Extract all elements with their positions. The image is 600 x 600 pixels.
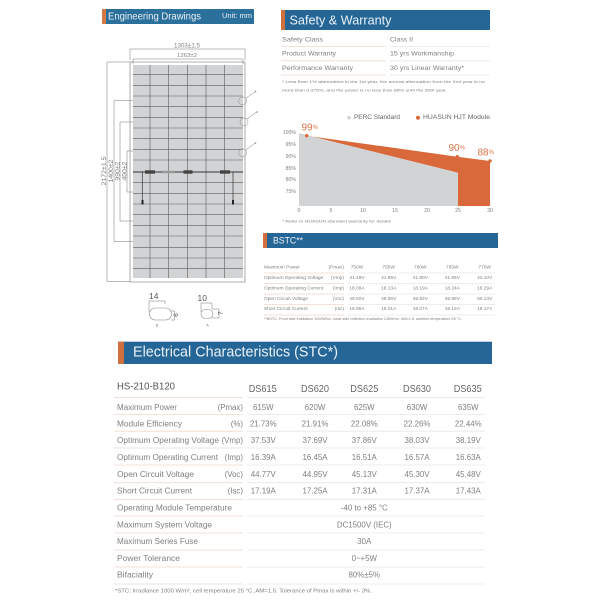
height dimensions: 990±2 xyxy=(114,161,121,180)
row: module efficiency: 21.91% xyxy=(302,420,328,428)
row: maximum system voltage xyxy=(117,520,392,530)
row: optimum operating voltage: Optimum Operating Voltage xyxy=(117,436,220,445)
x axis labels: 15 xyxy=(392,208,398,214)
height dimensions: 2172±1.5 xyxy=(101,156,108,186)
table: BSTC: 50.13V xyxy=(477,296,493,302)
table: BSTC: 18.19A xyxy=(413,286,429,292)
table: BSTC: 18.13A xyxy=(381,286,397,292)
row: short circuit current: 17.43A xyxy=(456,486,482,496)
row: short circuit current: 17.31A xyxy=(352,486,378,496)
x axis labels: 30 xyxy=(487,208,493,214)
row: optimum operating current: 16.51A xyxy=(352,453,378,462)
row: open circuit voltage: 44.77V xyxy=(251,470,277,479)
electrical footnote: *STC: Irradiance 1000 W/m², cell temperature 25 °C, AM=1.5. Tolerance of Pmax is within +/- 3%. xyxy=(115,589,372,595)
row: open circuit voltage xyxy=(117,470,482,479)
row: module efficiency: 22.44% xyxy=(455,420,482,428)
row: optimum operating current: 16.63A xyxy=(456,453,482,462)
header: electrical characteristics xyxy=(118,342,492,364)
table: electrical characteristics xyxy=(114,382,485,584)
row: maximum power: (Pmax) xyxy=(218,403,243,412)
table: BSTC: 41.80V xyxy=(413,275,429,281)
header: BSTC xyxy=(263,233,498,248)
table: safety and warranty: Product Warranty xyxy=(282,51,337,58)
row: bifaciality: Bifaciality xyxy=(117,570,153,580)
table: BSTC: 750W xyxy=(351,264,364,270)
row: operating module temperature: Operating Module Temperature xyxy=(117,504,233,512)
row: open circuit voltage: (Voc) xyxy=(225,470,243,479)
table: BSTC: Optimum Operating Current xyxy=(264,286,324,292)
y axis labels: 80% xyxy=(286,177,296,183)
column headings: DS615 xyxy=(249,383,277,395)
row: optimum operating voltage: 37.69V xyxy=(302,436,328,445)
table: BSTC: (Voc) xyxy=(333,296,344,302)
row: open circuit voltage: 45.13V xyxy=(352,470,378,479)
row: optimum operating voltage: 37.53V xyxy=(251,436,277,445)
table: safety and warranty xyxy=(281,36,490,75)
mounting hole detail A: 10 xyxy=(198,293,207,303)
header: safety and warranty: Safety & Warranty xyxy=(290,12,392,28)
row: maximum power: 635W xyxy=(458,403,479,412)
row: open circuit voltage: 45.30V xyxy=(404,470,430,479)
header: electrical characteristics: Electrical Characteristics (STC*) xyxy=(133,345,338,361)
mounting hole detail A xyxy=(198,293,224,328)
row: short circuit current xyxy=(117,486,482,496)
table: BSTC: 49.82V xyxy=(413,296,429,302)
table: BSTC: Maximum Power xyxy=(264,264,300,270)
height dimensions: 1400±2 xyxy=(108,159,115,182)
height dimensions: 400±2 xyxy=(121,161,128,180)
row: module efficiency: Module Efficiency xyxy=(117,420,182,428)
table: safety and warranty: 15 yrs Workmanship xyxy=(390,51,454,58)
row: short circuit current: Short Circuit Current xyxy=(117,486,193,496)
x axis labels: 10 xyxy=(360,208,366,214)
table: BSTC: (Isc) xyxy=(335,306,344,312)
overall width dimensions: 1263±2 xyxy=(177,53,197,59)
mounting hole detail B xyxy=(149,291,180,328)
y axis labels: 100% xyxy=(283,130,296,136)
table: BSTC: 755W xyxy=(382,264,395,270)
header: BSTC: BSTC** xyxy=(273,236,303,246)
area chart: linear warranty xyxy=(283,122,495,214)
row: short circuit current: (Isc) xyxy=(228,486,243,496)
row: power tolerance: 0~+5W xyxy=(352,554,378,563)
mounting hole detail B: B xyxy=(156,324,159,328)
table: BSTC: (Pmax) xyxy=(329,264,344,270)
y axis labels: 85% xyxy=(286,166,296,172)
table: BSTC: 41.95V xyxy=(445,275,461,281)
table: BSTC: 18.24A xyxy=(445,286,461,292)
row: module efficiency: 22.08% xyxy=(351,420,378,428)
row: maximum power: Maximum Power xyxy=(117,403,177,412)
chart legend: HUASUN HJT Module xyxy=(423,114,490,121)
chart legend xyxy=(347,114,490,121)
table: BSTC: 49.50V xyxy=(349,296,365,302)
table: BSTC: (Imp) xyxy=(333,286,344,292)
column headings: DS625 xyxy=(350,383,378,395)
row: maximum power: 615W xyxy=(253,403,274,412)
header: engineering drawings: Engineering Drawings xyxy=(108,12,201,22)
row: maximum series fuse: Maximum Series Fuse xyxy=(117,537,199,546)
mounting hole detail A: A xyxy=(206,324,209,328)
row: maximum power: 620W xyxy=(305,403,326,412)
junction boxes and cables xyxy=(142,170,234,204)
row: maximum system voltage: DC1500V (IEC) xyxy=(337,520,392,530)
x axis labels: 0 xyxy=(298,208,301,214)
x axis labels: 5 xyxy=(330,208,333,214)
row: maximum series fuse xyxy=(117,537,372,546)
row: optimum operating current: Optimum Operating Current xyxy=(117,453,219,462)
table: safety and warranty: 30 yrs Linear Warranty* xyxy=(390,65,464,72)
overall width dimensions: 1303±1.5 xyxy=(174,42,201,50)
row: optimum operating current xyxy=(117,453,482,462)
row: maximum system voltage: Maximum System Voltage xyxy=(117,520,213,530)
table: BSTC: 41.49V xyxy=(349,275,365,281)
data points and value labels xyxy=(302,122,495,163)
y axis labels: 75% xyxy=(286,189,296,195)
table: BSTC: Open Circuit Voltage xyxy=(264,296,308,302)
table: BSTC: 765W xyxy=(446,264,459,270)
table: BSTC: (Vmp) xyxy=(331,275,344,281)
table: BSTC: 42.10V xyxy=(477,275,493,281)
row: optimum operating current: 16.45A xyxy=(302,453,328,462)
warranty footnote: * Less than 1% attenuation in the 1st year, the annual attenuation from the 2nd year is no xyxy=(282,79,485,84)
row: optimum operating current: (Imp) xyxy=(225,453,243,462)
y axis labels: 95% xyxy=(286,142,296,148)
row: bifaciality: 80%±5% xyxy=(349,570,380,580)
HJT module area xyxy=(299,133,490,206)
table: BSTC: 18.08A xyxy=(349,286,365,292)
data points and value labels: 90% xyxy=(448,143,466,154)
row: optimum operating voltage: 38.19V xyxy=(456,436,482,445)
table: BSTC: 19.17A xyxy=(477,306,493,312)
PERC standard area xyxy=(299,133,458,206)
overall width dimensions xyxy=(130,42,245,64)
table: safety and warranty: Class II xyxy=(390,36,413,44)
row: module efficiency xyxy=(117,420,482,428)
header: engineering drawings xyxy=(102,9,254,24)
table: BSTC: 18.29A xyxy=(477,286,493,292)
table: safety and warranty: Safety Class xyxy=(282,36,324,44)
warranty footnote xyxy=(282,79,485,92)
row: short circuit current: 17.37A xyxy=(404,486,430,496)
chart footnote: * Refer to HUASUN standard warranty for details xyxy=(282,218,391,224)
table: BSTC: 18.96A xyxy=(349,306,365,312)
row: optimum operating current: 16.39A xyxy=(251,453,277,462)
row: optimum operating voltage: (Vmp) xyxy=(222,436,243,445)
table: BSTC xyxy=(264,264,495,315)
row: maximum power: 630W xyxy=(407,403,428,412)
column headings: HS-210-B120 xyxy=(117,382,176,392)
row: maximum power: 625W xyxy=(354,403,375,412)
table: BSTC: 49.66V xyxy=(381,296,397,302)
table: safety and warranty: Performance Warranty xyxy=(282,65,354,72)
mounting hole detail B: 14 xyxy=(149,291,159,301)
height dimensions xyxy=(101,62,133,282)
row: optimum operating current: 16.57A xyxy=(404,453,430,462)
x axis labels: 20 xyxy=(424,208,430,214)
row: optimum operating voltage xyxy=(117,436,482,445)
column headings: DS630 xyxy=(403,383,431,395)
table: BSTC: 760W xyxy=(414,264,427,270)
table: BSTC: 19.07A xyxy=(413,306,429,312)
data points and value labels: 99% xyxy=(302,122,319,134)
detail callout circles xyxy=(239,91,258,157)
row: power tolerance xyxy=(117,554,378,563)
row: open circuit voltage: 45.48V xyxy=(456,470,482,479)
column headings: DS620 xyxy=(301,383,329,395)
row: power tolerance: Power Tolerance xyxy=(117,554,181,563)
row: maximum series fuse: 30A xyxy=(357,537,372,546)
table: BSTC: 49.98V xyxy=(445,296,461,302)
header: safety and warranty xyxy=(281,10,490,30)
table: BSTC: 41.65V xyxy=(381,275,397,281)
mounting hole detail A: 7 xyxy=(218,311,224,315)
row: optimum operating voltage: 37.86V xyxy=(352,436,378,445)
y axis labels: 90% xyxy=(286,154,296,160)
row: module efficiency: 22.26% xyxy=(404,420,430,428)
y axis labels xyxy=(283,130,296,195)
warranty footnote: more than 0.375%, and the power is no less than 88% until the 30th year. xyxy=(282,88,447,92)
row: module efficiency: (%) xyxy=(231,420,243,428)
row: operating module temperature xyxy=(117,504,388,512)
column headings: DS635 xyxy=(454,383,482,395)
row: bifaciality xyxy=(117,570,380,580)
column headings xyxy=(117,382,482,395)
table: BSTC: 770W xyxy=(478,264,491,270)
row: short circuit current: 17.25A xyxy=(302,486,328,496)
x axis labels xyxy=(298,208,493,214)
module frame and cell grid xyxy=(130,62,245,282)
x axis labels: 25 xyxy=(455,208,461,214)
row: module efficiency: 21.73% xyxy=(250,420,277,428)
table: BSTC: 19.01A xyxy=(381,306,397,312)
table: BSTC: Short Circuit Current xyxy=(264,306,308,312)
row: open circuit voltage: 44.95V xyxy=(302,470,328,479)
BSTC footnote: **BSTC: Front side irradiation 1000W/m², back side reflection irradiation 135W/m², AM=1.5, ambient temperature 25 °C. xyxy=(264,317,462,321)
header: engineering drawings: Unit: mm xyxy=(222,13,252,20)
table: BSTC: Optimum Operating Voltage xyxy=(264,275,324,281)
mounting hole detail B: 6 xyxy=(173,313,180,317)
row: open circuit voltage: Open Circuit Voltage xyxy=(117,470,195,479)
panel: module engineering drawing xyxy=(101,42,258,282)
row: optimum operating voltage: 38.03V xyxy=(404,436,430,445)
row: operating module temperature: -40 to +85 °C xyxy=(341,504,388,512)
chart legend: PERC Standard xyxy=(354,114,400,121)
data points and value labels: 88% xyxy=(478,148,495,158)
row: maximum power xyxy=(117,403,479,412)
table: BSTC: 19.12A xyxy=(445,306,461,312)
row: short circuit current: 17.19A xyxy=(251,486,277,496)
